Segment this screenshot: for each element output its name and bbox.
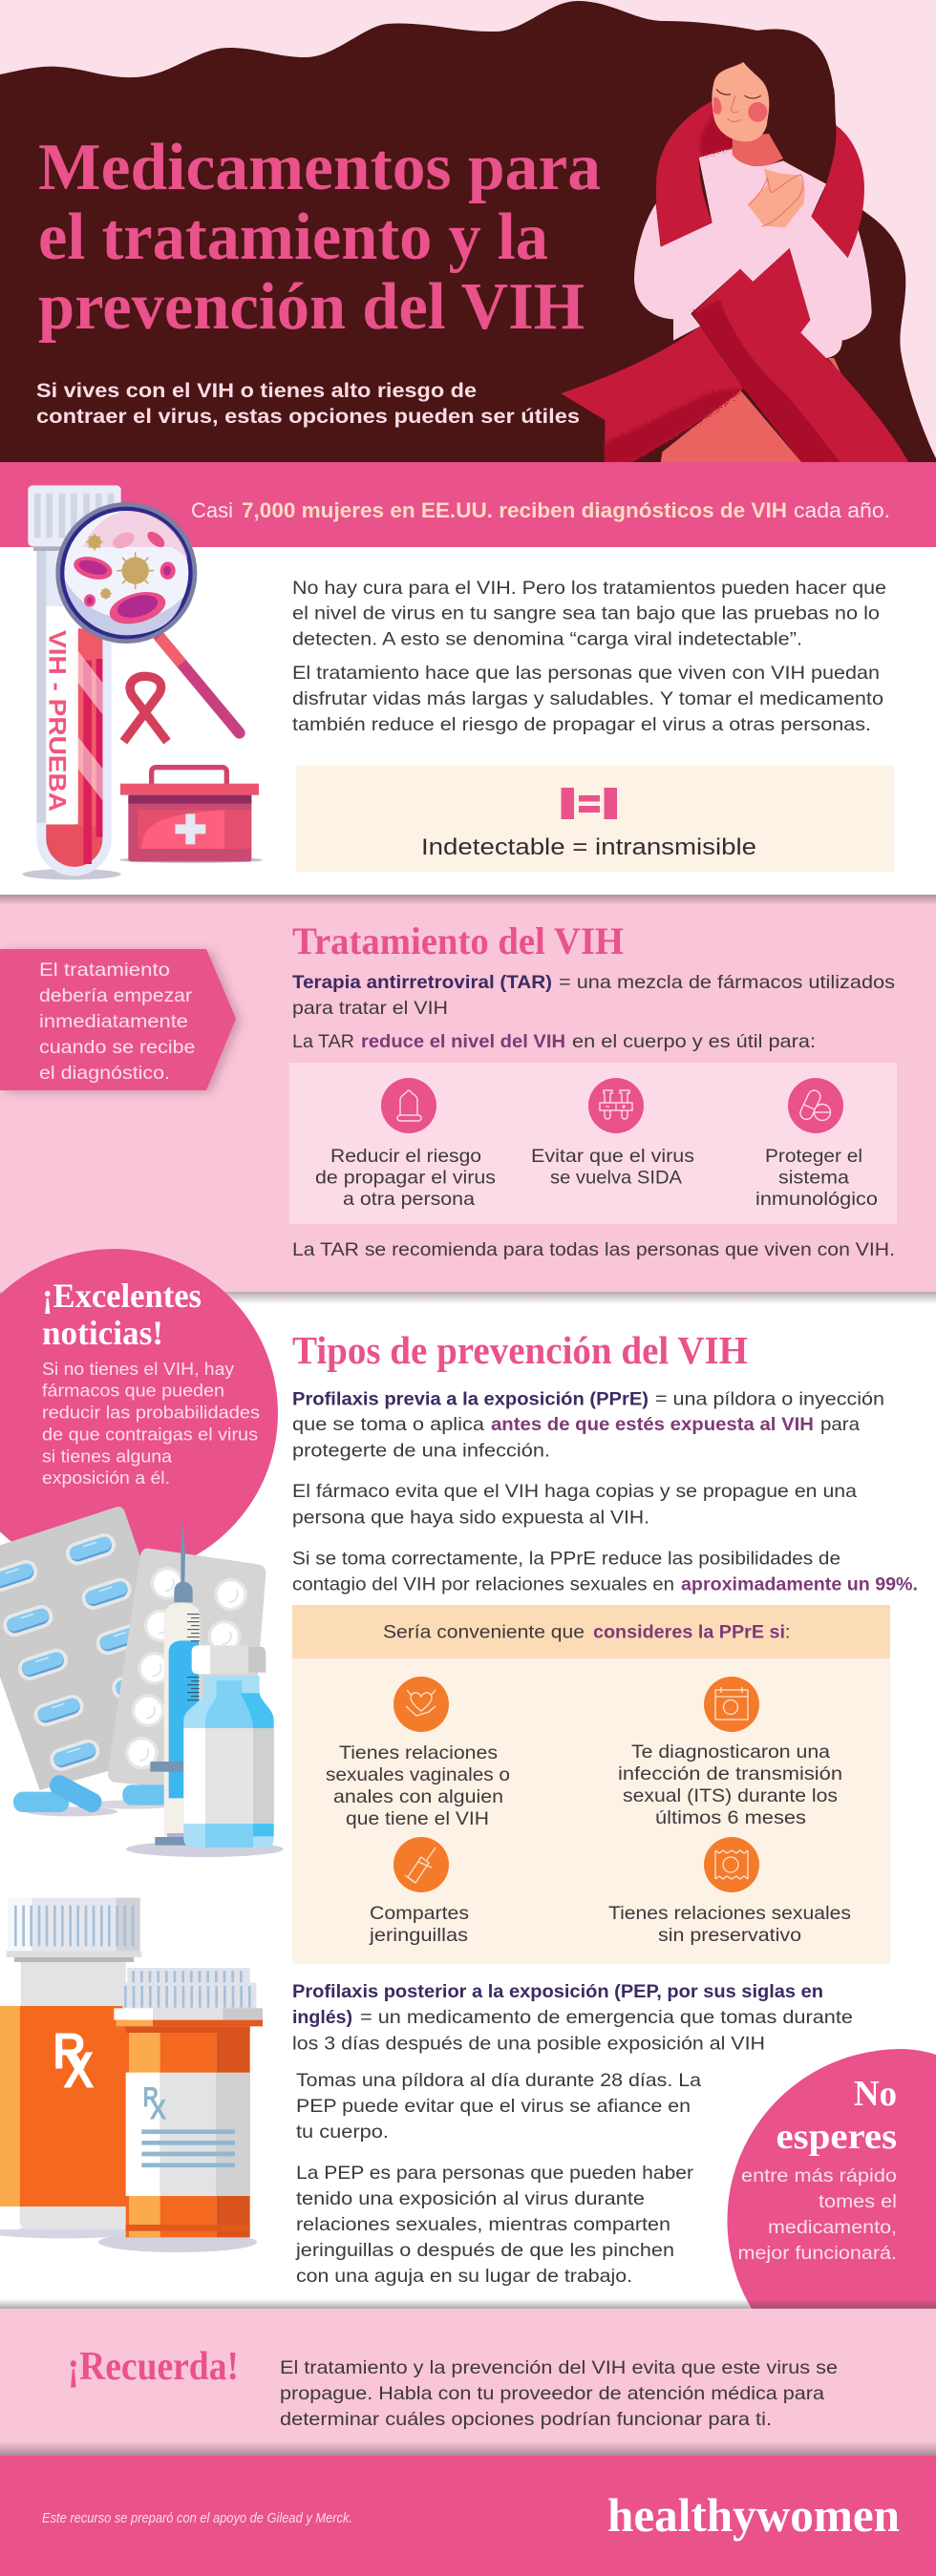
callout circle: excellent news: de que contraigas el virus: [42, 1425, 258, 1445]
subtitle: [36, 379, 580, 428]
statistic text: Casi: [191, 498, 233, 522]
callout circle: excellent news: Si no tienes el VIH, hay: [42, 1359, 235, 1379]
condition: STI diagnosis: sexual (ITS) durante los: [623, 1785, 838, 1806]
statistic text: cada año.: [794, 498, 890, 522]
text block: PrEP: = una píldora o inyección: [655, 1389, 884, 1410]
text block: PrEP: que se toma o aplica: [292, 1414, 484, 1435]
syringe: [150, 1521, 200, 1846]
text block: PrEP: persona que haya sido expuesta al VIH.: [292, 1508, 649, 1529]
recommendation: La TAR se recomienda para todas las personas que viven con VIH.: [292, 1239, 895, 1260]
hair and brown wave background: [0, 1, 936, 462]
text block: PrEP: para: [820, 1414, 860, 1435]
text block: [280, 2357, 838, 2430]
callout: undetectable equals untransmittable: Indetectable = intransmisible: [421, 834, 756, 860]
heading: Tratamiento del VIH: [292, 919, 624, 962]
text block: no cure: también reduce el riesgo de propagar el virus a otras personas.: [292, 714, 871, 735]
text block: PrEP: [292, 1389, 918, 1595]
callout circle: do not wait: mejor funcionará.: [737, 2243, 897, 2264]
benefit: protect immune system: Proteger el: [765, 1146, 862, 1167]
Rx label small: R: [142, 2082, 159, 2114]
text block: PEP: jeringuillas o después de que les pinchen: [295, 2240, 674, 2261]
title: prevención del VIH: [38, 270, 585, 344]
blister pack of tablets: [108, 1549, 266, 1795]
benefit: protect immune system: [755, 1078, 878, 1210]
large prescription bottle: X: [63, 2043, 95, 2100]
text block: PEP: tenido una exposición al virus durante: [296, 2188, 645, 2209]
callout circle: excellent news: reducir las probabilidades: [42, 1403, 260, 1423]
benefit: reduce risk: [315, 1078, 496, 1210]
text block: TAR definition: Terapia antirretroviral (TAR): [292, 972, 552, 993]
text block: PrEP: El fármaco evita que el VIH haga copias y se propague en una: [292, 1481, 857, 1502]
callout circle: excellent news: ¡Excelentes: [42, 1277, 202, 1315]
subtitle: contraer el virus, estas opciones pueden ser útiles: [36, 405, 580, 428]
logo: healthywomen: [607, 2488, 900, 2542]
text block: PEP: con una aguja en su lugar de trabajo.: [296, 2266, 632, 2287]
text block: determinar cuáles opciones podrían funcionar para ti.: [280, 2409, 772, 2430]
illustration: prescription bottles: [0, 1898, 263, 2252]
callout arrow: start immediately: El tratamiento: [39, 960, 170, 981]
title: el tratamiento y la: [38, 201, 548, 274]
panel: statistic strip: [0, 462, 936, 547]
tube label: VIH - PRUEBA: [44, 630, 70, 812]
callout circle: do not wait: [727, 2049, 936, 2309]
text block: TAR definition: = una mezcla de fármacos utilizados: [559, 972, 895, 993]
text block: El tratamiento y la prevención del VIH evita que este virus se: [280, 2357, 838, 2378]
vial: [183, 1645, 274, 1848]
text block: PrEP: Profilaxis previa a la exposición (PPrE): [292, 1389, 649, 1410]
panel: consider PrEP: [292, 1605, 890, 1964]
condition: sharing syringes: [369, 1837, 469, 1946]
callout arrow: start immediately: el diagnóstico.: [39, 1063, 170, 1084]
panel: HIV treatment: [0, 895, 936, 1292]
title: [38, 131, 601, 344]
condition: sexual relations with HIV partner: anales con alguien: [333, 1786, 503, 1807]
text block: no cure: disfrutar vidas más largas y saludables. Y tomar el medicamento: [292, 688, 883, 709]
text block: PEP: Tomas una píldora al día durante 28 días. La: [296, 2070, 701, 2091]
text block: PrEP: antes de que estés expuesta al VIH: [491, 1414, 814, 1435]
text block: TAR definition: en el cuerpo y es útil para:: [572, 1031, 816, 1052]
benefit: reduce risk: a otra persona: [343, 1189, 475, 1210]
box heading: [383, 1622, 790, 1643]
large prescription bottle: [0, 1898, 141, 2229]
callout circle: do not wait: medicamento,: [768, 2217, 897, 2238]
text block: PEP: = un medicamento de emergencia que tomas durante: [360, 2007, 853, 2028]
text block: PrEP: Si se toma correctamente, la PPrE reduce las posibilidades de: [292, 1549, 840, 1570]
text block: PEP: [292, 1981, 853, 2287]
text block: TAR definition: La TAR: [292, 1031, 354, 1052]
callout arrow: start immediately: [0, 949, 236, 1090]
panel: remember: [0, 2309, 936, 2456]
callout circle: excellent news: [0, 1249, 278, 1577]
text block: PEP: relaciones sexuales, mientras comparten: [296, 2214, 670, 2235]
condition: sharing syringes: jeringuillas: [369, 1925, 468, 1946]
first aid kit: [119, 768, 263, 863]
callout arrow: start immediately: inmediatamente: [39, 1011, 188, 1032]
text block: no cure: [292, 578, 886, 735]
benefits box: [289, 1063, 897, 1224]
benefit: reduce risk: de propagar el virus: [315, 1167, 496, 1188]
condition: sexual relations with HIV partner: que tiene el VIH: [346, 1808, 489, 1829]
text block: TAR definition: reduce el nivel del VIH: [361, 1031, 565, 1052]
callout arrow: start immediately: cuando se recibe: [39, 1037, 195, 1058]
condition: sexual relations with HIV partner: Tienes relaciones: [339, 1742, 498, 1763]
text block: PEP: Profilaxis posterior a la exposición (PEP, por sus siglas en: [292, 1981, 823, 2002]
illustration: woman with ribbon: [561, 51, 909, 463]
callout arrow: start immediately: debería empezar: [39, 985, 193, 1006]
small prescription bottle: [114, 1968, 263, 2237]
benefit: avoid AIDS: [531, 1078, 694, 1188]
condition: sharing syringes: Compartes: [370, 1903, 469, 1924]
title: Medicamentos para: [38, 131, 601, 204]
callout: undetectable equals untransmittable: [296, 766, 894, 872]
text block: propague. Habla con tu proveedor de atención médica para: [280, 2383, 824, 2404]
condition: STI diagnosis: [618, 1677, 842, 1828]
callout circle: do not wait: No: [854, 2074, 897, 2114]
text block: PEP: tu cuerpo.: [296, 2122, 389, 2143]
small prescription bottle: X: [150, 2094, 166, 2125]
condition: no condom: [608, 1837, 851, 1946]
text block: PEP: los 3 días después de una posible exposición al VIH: [292, 2034, 765, 2055]
text block: TAR definition: para tratar el VIH: [292, 998, 448, 1019]
benefit: avoid AIDS: se vuelva SIDA: [550, 1167, 682, 1188]
benefit: reduce risk: Reducir el riesgo: [330, 1146, 481, 1167]
sponsor note: Este recurso se preparó con el apoyo de Gilead y Merck.: [42, 2510, 352, 2526]
text block: TAR definition: [292, 972, 895, 1052]
benefit: avoid AIDS: Evitar que el virus: [531, 1146, 694, 1167]
loose pills: [13, 1772, 174, 1816]
condition: STI diagnosis: infección de transmisión: [618, 1763, 842, 1784]
box heading: Sería conveniente que: [383, 1622, 585, 1643]
callout circle: excellent news: fármacos que pueden: [42, 1381, 224, 1401]
condition: sexual relations with HIV partner: [326, 1677, 510, 1829]
box heading: consideres la PPrE si: [593, 1622, 785, 1643]
callout circle: do not wait: entre más rápido: [741, 2165, 897, 2186]
text block: PrEP: protegerte de una infección.: [292, 1441, 550, 1462]
text block: PEP: PEP puede evitar que el virus se afiance en: [296, 2096, 691, 2117]
footer: [0, 2456, 936, 2576]
callout circle: excellent news: exposición a él.: [42, 1467, 170, 1488]
heading: Tipos de prevención del VIH: [292, 1328, 748, 1372]
text block: no cure: detecten. A esto se denomina “carga viral indetectable”.: [292, 629, 802, 650]
callout circle: excellent news: noticias!: [42, 1314, 163, 1352]
panel: prevention types: [0, 1292, 936, 2309]
text block: PEP: La PEP es para personas que pueden haber: [296, 2163, 694, 2184]
text block: PrEP: contagio del VIH por relaciones sexuales en: [292, 1574, 674, 1595]
magnifier: [55, 502, 240, 733]
statistic text: 7,000 mujeres en EE.UU. reciben diagnósticos de VIH: [242, 498, 787, 522]
ribbon: [123, 676, 167, 742]
callout circle: do not wait: esperes: [776, 2117, 897, 2157]
condition: sexual relations with HIV partner: sexuales vaginales o: [326, 1764, 510, 1785]
callout circle: excellent news: si tienes alguna: [42, 1446, 173, 1467]
condition: no condom: sin preservativo: [658, 1925, 801, 1946]
subtitle: Si vives con el VIH o tienes alto riesgo de: [36, 379, 477, 402]
panel: hero: [0, 0, 936, 463]
benefit: protect immune system: inmunológico: [755, 1189, 878, 1210]
callout circle: do not wait: tomes el: [819, 2191, 897, 2212]
icon: I=I: [562, 788, 617, 819]
Rx label: R: [53, 2024, 86, 2080]
condition: STI diagnosis: Te diagnosticaron una: [631, 1742, 830, 1763]
panel: no cure: [0, 547, 936, 895]
heading: ¡Recuerda!: [68, 2345, 239, 2389]
text block: no cure: No hay cura para el VIH. Pero los tratamientos pueden hacer que: [292, 578, 886, 599]
benefit: protect immune system: sistema: [778, 1167, 849, 1188]
text block: no cure: el nivel de virus en tu sangre sea tan bajo que las pruebas no lo: [292, 603, 880, 624]
text block: no cure: El tratamiento hace que las personas que viven con VIH puedan: [292, 663, 880, 684]
box heading: :: [785, 1622, 790, 1643]
illustration: pill blisters, syringe and vial: [0, 1507, 284, 1857]
illustration: test tube, magnifier, ribbon and first aid kit: [22, 485, 263, 879]
blister pack of capsules: [0, 1507, 203, 1790]
condition: STI diagnosis: últimos 6 meses: [655, 1807, 806, 1828]
text block: PEP: inglés): [292, 2007, 352, 2028]
condition: no condom: Tienes relaciones sexuales: [608, 1903, 851, 1924]
text block: PrEP: aproximadamente un 99%.: [681, 1574, 918, 1595]
